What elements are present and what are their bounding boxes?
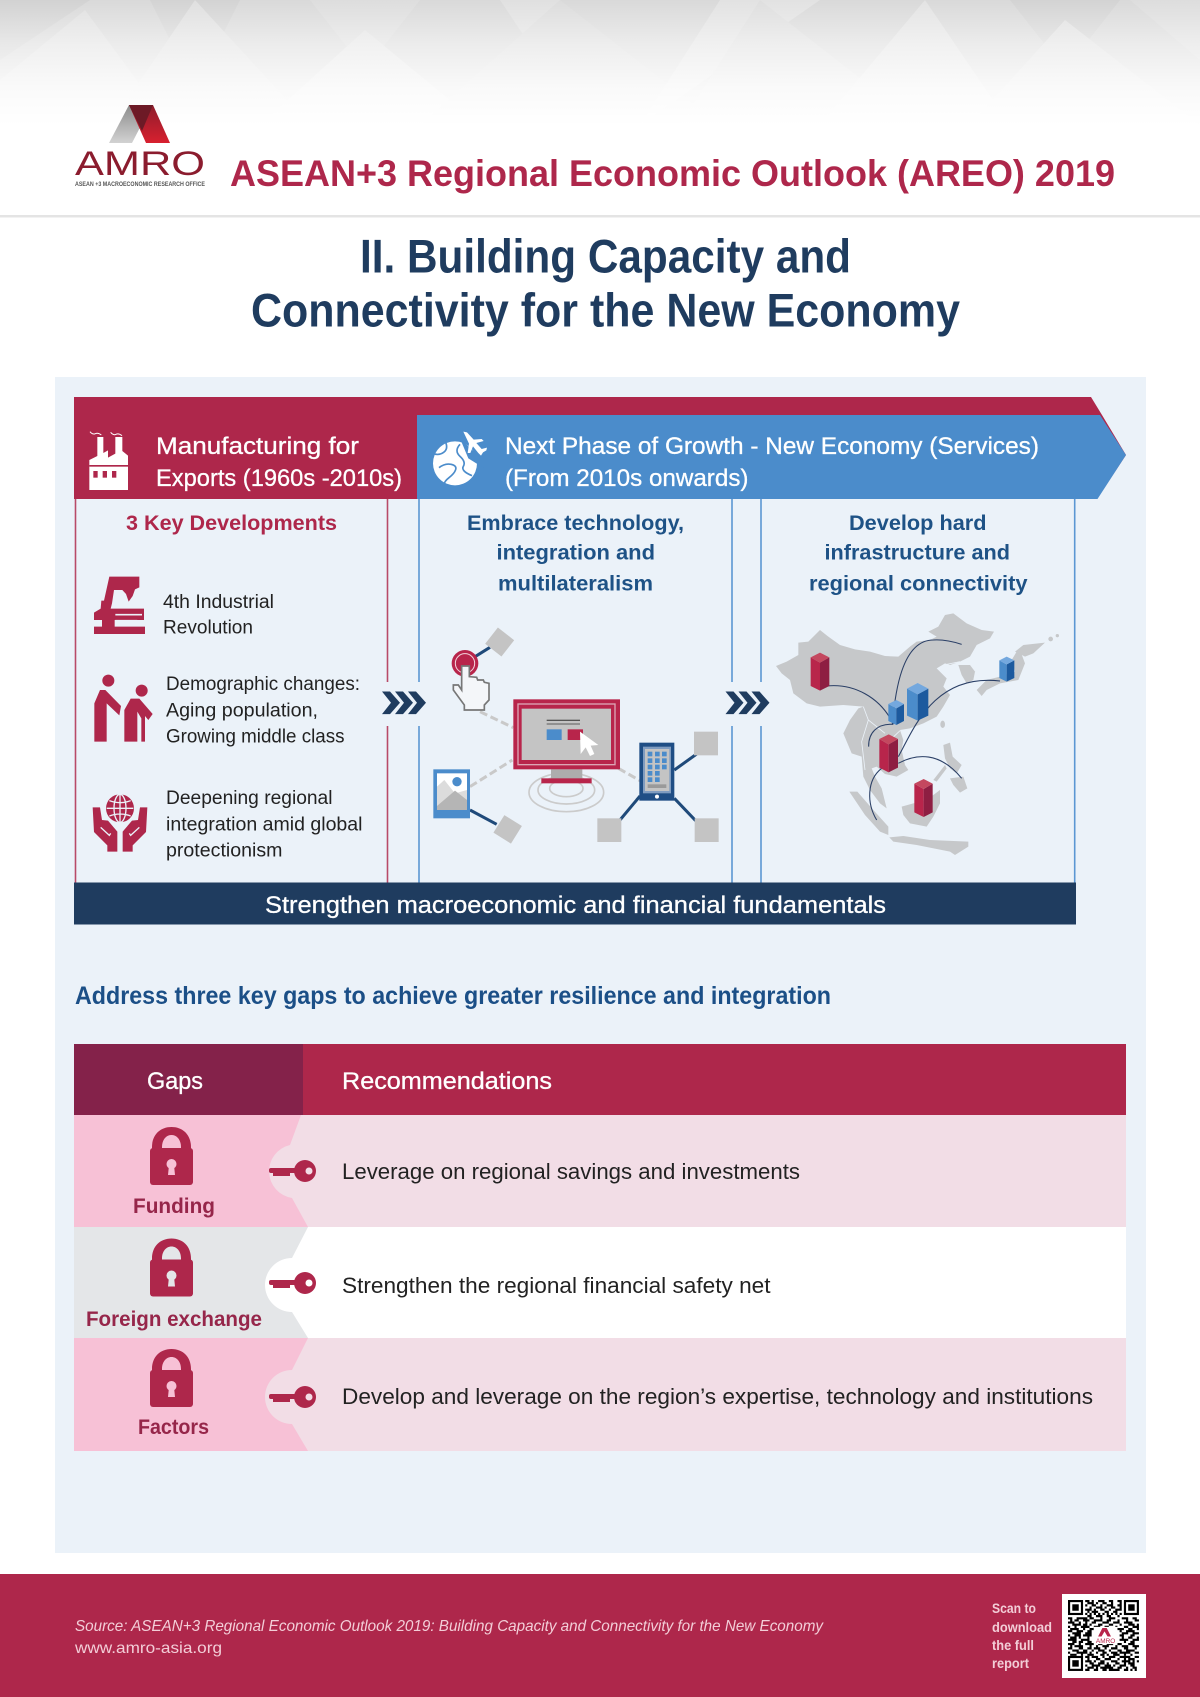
text: regional integration [166,788,362,862]
icon: key [269,1272,316,1294]
AMRO logo: AMRO [75,145,205,183]
column: 3 key developments [93,512,363,862]
banner: manufacturing for exports: Manufacturing for [156,433,359,460]
footer [0,1574,1200,1697]
table header: Gaps [147,1068,203,1095]
main heading: Connectivity for the New Economy [251,284,960,336]
source note: www.amro-asia.org [74,1640,222,1657]
row: foreign exchange: Strengthen the regional financial safety net [342,1273,770,1298]
banner: new economy arrow [417,415,1126,499]
text: 4th industrial revolution: 4th Industrial [163,592,274,613]
row: factors: Factors [138,1416,209,1439]
text: demographic changes: Demographic changes: [166,674,360,695]
bars: red [811,653,933,817]
icon: lock [150,1349,193,1407]
text: 4th industrial revolution: Revolution [163,618,253,638]
banner: manufacturing for exports [74,397,1126,499]
column: embrace technology [433,512,719,844]
AMRO logo [75,105,205,188]
panel: economy phases background [55,377,1146,1553]
header background pattern [0,0,1200,126]
subheading: three key gaps: Address three key gaps to achieve greater resilience and integration [75,982,831,1010]
QR caption: download [992,1620,1052,1635]
source note [74,1618,824,1657]
text: 4th industrial revolution [163,592,274,638]
arrow: chevrons to infrastructure column [726,692,770,714]
bar: macroeconomic fundamentals: Strengthen macroeconomic and financial fundamentals [265,892,886,919]
column heading: regional connectivity [809,572,1028,596]
source note: Source: ASEAN+3 Regional Economic Outlook 2019: Building Capacity and Connectivity for the New Economy [75,1618,824,1635]
banner: new economy arrow: (From 2010s onwards) [505,465,748,492]
column heading: infrastructure and [824,542,1010,564]
illustration: connected devices [433,627,719,844]
icon: machine [94,577,145,634]
QR centre logo: AMRO [1096,1639,1116,1645]
QR caption: Scan to [992,1601,1036,1616]
main heading: II. Building Capacity and [360,230,851,282]
QR code [1062,1594,1146,1678]
column heading: integration and [496,542,655,564]
bar: macroeconomic fundamentals [74,882,1076,924]
table: gaps and recommendations [74,1044,1126,1451]
QR caption: report [992,1656,1029,1671]
text: demographic changes [166,674,360,748]
report title: ASEAN+3 Regional Economic Outlook (AREO) 2019 [230,153,1115,194]
icon: globe with plane [433,432,487,485]
row: funding: Funding [133,1195,215,1218]
table header [74,1044,1126,1115]
row: funding: Leverage on regional savings and investments [342,1159,800,1184]
row: foreign exchange: Foreign exchange [86,1308,262,1331]
banner: manufacturing for exports: Exports (1960s -2010s) [156,465,402,492]
column heading: 3 Key Developments [126,512,337,535]
icon: lock [150,1238,193,1296]
icon: factory [89,432,128,490]
column heading [809,512,1028,596]
banner: new economy arrow: Next Phase of Growth - New Economy (Services) [505,433,1039,460]
column heading: multilateralism [498,572,653,596]
QR caption: the full [992,1638,1034,1653]
main heading [251,230,960,336]
text: demographic changes: Growing middle class [166,726,344,748]
AMRO logo: ASEAN +3 MACROECONOMIC RESEARCH OFFICE [75,182,205,188]
column heading [467,512,684,596]
icon: tablet [639,743,674,801]
QR caption [992,1601,1052,1671]
row: factors: Develop and leverage on the region’s expertise, technology and institutions [342,1384,1093,1409]
row: foreign exchange [74,1227,1126,1338]
text: regional integration: Deepening regional [166,788,332,809]
map: East and Southeast Asia [776,613,1059,855]
arrow: chevrons to technology column [382,692,426,714]
icon: elderly people [94,675,153,742]
icon: key [269,1160,316,1182]
row: funding [74,1115,1126,1227]
icon: lock [150,1127,193,1185]
row: factors [74,1338,1126,1451]
column heading: Embrace technology, [467,512,684,535]
text: regional integration: integration amid global [166,814,362,836]
icon: key [269,1386,316,1408]
icon: picture card [433,769,470,818]
table header: Recommendations [342,1068,552,1095]
column divider lines [76,499,1075,883]
text: demographic changes: Aging population, [166,700,318,722]
column: hard infrastructure [776,512,1059,855]
icon: touch button and hand cursor [452,650,489,710]
bars: blue [888,657,1014,725]
connection arcs [827,640,1000,820]
column heading: Develop hard [849,512,986,535]
icon: hands holding globe [93,794,147,852]
text: regional integration: protectionism [166,840,282,862]
icon: desktop monitor [513,699,620,812]
